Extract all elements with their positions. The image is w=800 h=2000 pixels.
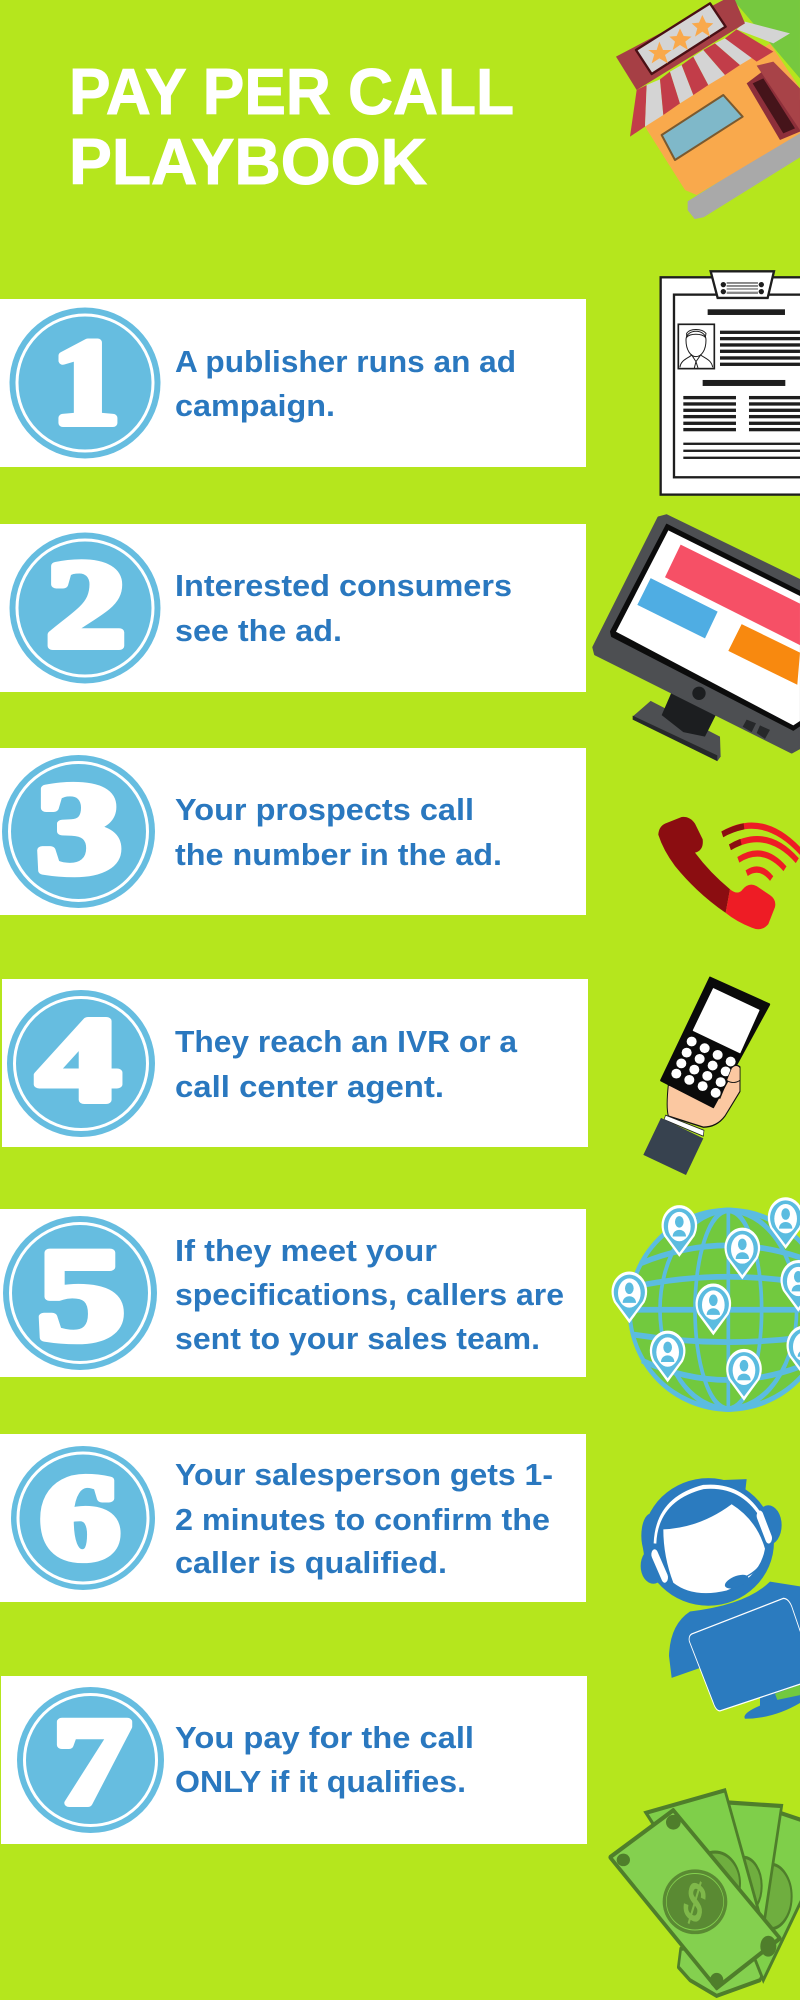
step 4 number badge — [7, 990, 155, 1137]
step 4 number badge: 4 — [37, 993, 120, 1126]
step 1 text: A publisher runs an ad — [175, 344, 516, 379]
title — [69, 55, 514, 198]
step 5 text: sent to your sales team. — [175, 1321, 540, 1356]
step 2 text: Interested consumers — [175, 568, 512, 603]
panel: step 5 — [0, 1209, 586, 1377]
icon: ringing phone — [658, 817, 800, 929]
step 2 number badge: 2 — [46, 536, 126, 674]
step 5 number badge: 5 — [37, 1221, 125, 1368]
icon: call centre agent — [641, 1478, 800, 1719]
step 5 text — [175, 1233, 564, 1356]
step 5 number badge — [3, 1216, 157, 1370]
step 6 text — [175, 1457, 553, 1580]
step 1 number badge: 1 — [52, 315, 120, 450]
title: PAY PER CALL — [69, 55, 514, 128]
step 7 text: ONLY if it qualifies. — [175, 1764, 466, 1799]
panel: step 1 — [0, 299, 586, 467]
step 1 text — [175, 344, 516, 423]
icon: storefront — [616, 0, 800, 218]
step 7 text: You pay for the call — [175, 1720, 474, 1755]
step 6 text: 2 minutes to confirm the — [175, 1502, 550, 1537]
icon: globe with location pins — [612, 1197, 800, 1412]
panel: step 6 — [0, 1434, 586, 1602]
step 1 text: campaign. — [175, 388, 335, 423]
panel: step 7 — [1, 1676, 587, 1844]
step 2 number badge — [10, 532, 160, 684]
step 3 text: the number in the ad. — [175, 837, 502, 872]
step 2 text — [175, 568, 512, 648]
panel: step 2 — [0, 524, 586, 692]
step 6 text: Your salesperson gets 1- — [175, 1457, 553, 1492]
step 3 number badge — [2, 755, 155, 908]
icon: desktop monitor — [593, 516, 800, 761]
step 3 text — [175, 792, 502, 872]
step 4 text: call center agent. — [175, 1069, 444, 1104]
step 2 text: see the ad. — [175, 613, 342, 648]
step 7 text — [175, 1720, 474, 1799]
step 6 text: caller is qualified. — [175, 1545, 447, 1580]
title: PLAYBOOK — [69, 125, 427, 198]
step 5 text: If they meet your — [175, 1233, 437, 1268]
step 1 number badge — [10, 308, 160, 458]
step 6 number badge — [11, 1446, 155, 1590]
step 4 text — [175, 1024, 518, 1104]
icon: stack of dollar bills: $ — [677, 1868, 712, 1938]
icon: hand holding mobile phone — [643, 978, 769, 1175]
step 3 text: Your prospects call — [175, 792, 474, 827]
step 6 number badge: 6 — [40, 1451, 120, 1585]
icon: stack of dollar bills — [610, 1790, 800, 1996]
step 7 number badge — [17, 1687, 164, 1833]
step 4 text: They reach an IVR or a — [175, 1024, 518, 1059]
step 7 number badge: 7 — [53, 1693, 131, 1830]
panel: step 3 — [0, 748, 586, 915]
step 3 number badge: 3 — [36, 757, 122, 901]
step 5 text: specifications, callers are — [175, 1277, 564, 1312]
panel: step 4 — [2, 979, 588, 1147]
icon: clipboard resume — [661, 271, 800, 495]
